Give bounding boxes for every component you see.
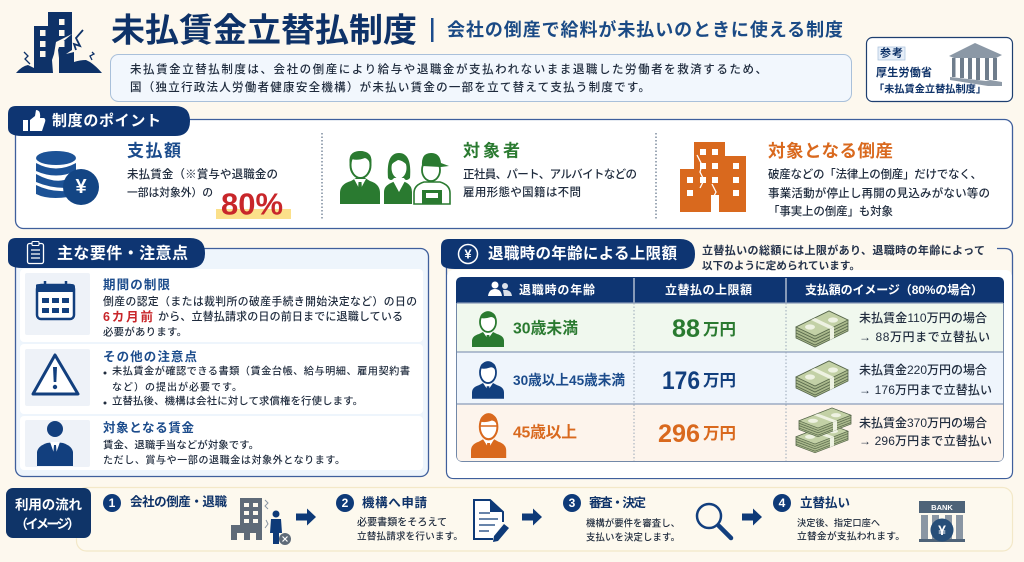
step 3: 機構が要件を審査し、 — [586, 518, 680, 528]
panel: 制度のポイント — [8, 106, 1012, 228]
step 1: 会社の倒産・退職 — [130, 494, 227, 509]
icon: cracked orange building — [680, 142, 746, 212]
arrow — [522, 508, 542, 526]
対象となる倒産 text block: 「事実上の倒産」も対象 — [768, 204, 894, 218]
note text: 以下のように定められています。 — [702, 260, 860, 272]
reference box — [866, 38, 1012, 102]
worker: cap and apron — [414, 153, 450, 204]
intro text block: 未払賃金立替払制度は、会社の倒産により給与や退職金が支払われないまま退職した労働者を救済するため、 — [130, 62, 767, 76]
step 4: 立替払い — [800, 495, 850, 510]
table header: 立替払の上限額 — [665, 282, 752, 297]
table header — [456, 277, 1004, 303]
step 2: 機構へ申請 — [362, 495, 427, 510]
icon: three workers — [340, 151, 450, 204]
row: 30歳以上45歳未満: 未払賃金220万円の場合 — [859, 362, 987, 377]
row: 30歳未満: → 88万円まで立替払い — [859, 329, 990, 344]
worker: woman — [384, 153, 412, 204]
step 1 — [103, 494, 291, 545]
panel: 退職時の年齢による上限額 — [441, 239, 1012, 478]
row: 45歳以上 — [457, 404, 1003, 461]
label: 利用の流れ: （イメージ） — [15, 516, 80, 532]
step 2: 2 — [342, 496, 349, 510]
row: 30歳以上45歳未満: 30歳以上45歳未満 — [513, 372, 625, 388]
icon: magnifier — [697, 504, 731, 538]
支払額 text block: 一部は対象外）の — [127, 185, 213, 199]
step 4 — [773, 494, 965, 542]
row: その他の注意点: 立替払後、機構は会社に対して求償権を行使します。 — [112, 394, 363, 408]
subtitle: 会社の倒産で給料が未払いのときに使える制度 — [447, 19, 843, 40]
row: 30歳未満: 88 — [672, 315, 700, 343]
reference box: 厚生労働省 — [876, 65, 932, 79]
reference box: 参考 — [880, 46, 903, 60]
支払額 text block: 未払賃金（※賞与や退職金の — [127, 167, 278, 181]
icon: man with glasses — [471, 414, 506, 458]
heading tab: 退職時の年齢による上限額: 退職時の年齢による上限額 — [488, 244, 677, 262]
step 4: 決定後、指定口座へ — [797, 517, 880, 528]
label: 利用の流れ — [6, 488, 91, 538]
row: 30歳未満 — [457, 303, 1003, 352]
intro text block — [110, 54, 852, 102]
row: その他の注意点 — [25, 349, 410, 408]
icon: ministry building — [949, 43, 1002, 86]
row: 期間の制限: 期間の制限 — [103, 278, 170, 292]
row: 期間の制限: 必要があります。 — [103, 326, 187, 338]
icon: closed building and person — [231, 498, 291, 545]
panel: 利用の流れ — [6, 488, 1012, 551]
heading tab: 退職時の年齢による上限額 — [441, 239, 695, 269]
icon: warning triangle — [33, 355, 78, 394]
支払額 text block — [127, 140, 291, 222]
heading tab: 制度のポイント: 制度のポイント — [52, 112, 161, 130]
icon: person in suit — [37, 421, 73, 466]
row: 30歳未満: 30歳未満 — [513, 320, 578, 338]
note text — [702, 243, 985, 272]
row: 対象となる賃金 — [25, 420, 345, 467]
note text: 立替払いの総額には上限があり、退職時の年齢によって — [702, 243, 985, 257]
title: 未払賃金立替払制度 — [111, 12, 417, 48]
対象となる倒産 text block: 対象となる倒産 — [768, 141, 893, 161]
対象となる倒産 text block — [768, 141, 990, 218]
対象となる倒産 text block: 事業活動が停止し再開の見込みがない等の — [768, 186, 990, 200]
row: 期間の制限: 倒産の認定（または裁判所の破産手続き開始決定など）の日の — [103, 294, 417, 308]
icon: bank: ¥ — [938, 522, 946, 538]
row: 45歳以上: 296 — [658, 420, 700, 448]
row: 30歳未満: 未払賃金110万円の場合 — [859, 310, 987, 325]
step 3: 3 — [569, 496, 576, 510]
row: 45歳以上: → 296万円まで立替払い — [859, 433, 992, 448]
row: 45歳以上: 未払賃金370万円の場合 — [859, 415, 987, 430]
icon: coins and yen: ¥ — [75, 176, 87, 198]
icon: bank: BANK — [931, 503, 953, 512]
label: 利用の流れ: 利用の流れ — [15, 498, 82, 512]
row: 30歳以上45歳未満: 万円 — [703, 372, 736, 390]
支払額 text block: 80% — [221, 186, 283, 222]
row: 対象となる賃金: 対象となる賃金 — [103, 420, 194, 435]
icon: coins and yen — [36, 151, 99, 205]
arrow — [742, 508, 762, 526]
対象者 text block — [463, 140, 637, 199]
支払額 text block: 支払額 — [127, 140, 181, 160]
icon: document and pen — [474, 500, 509, 542]
row: 30歳以上45歳未満: 176 — [662, 367, 700, 395]
table header: 支払額のイメージ（80%の場合） — [805, 282, 983, 297]
intro text block: 国（独立行政法人労働者健康安全機構）が未払い賃金の一部を立て替えて支払う制度です。 — [130, 80, 650, 94]
row: 45歳以上: 45歳以上 — [513, 424, 577, 442]
対象となる倒産 text block: 破産などの「法律上の倒産」だけでなく、 — [768, 167, 982, 181]
row: 30歳以上45歳未満: → 176万円まで立替払い — [859, 382, 992, 397]
step 4: 4 — [779, 496, 786, 510]
heading tab: 主な要件・注意点 — [8, 238, 205, 268]
row: 30歳未満: 万円 — [703, 321, 736, 339]
対象者 text block: 対象者 — [463, 140, 520, 160]
step 1: 1 — [109, 496, 116, 510]
step 4: 立替金が支払われます。 — [797, 530, 905, 542]
row: 対象となる賃金: ただし、賞与や一部の退職金は対象外となります。 — [103, 454, 345, 466]
row: その他の注意点: 未払賃金が確認できる書類（賃金台帳、給与明細、雇用契約書 — [112, 364, 410, 378]
row: 期間の制限 — [25, 273, 417, 338]
step 3: 審査・決定 — [589, 495, 646, 510]
row: その他の注意点: その他の注意点 — [103, 349, 197, 364]
icon: calendar — [36, 281, 75, 319]
heading tab: 制度のポイント — [8, 106, 190, 136]
対象者 text block: 雇用形態や国籍は不問 — [463, 185, 581, 199]
対象者 text block: 正社員、パート、アルバイトなどの — [463, 167, 637, 181]
heading tab: 退職時の年齢による上限額: ¥ — [464, 246, 472, 262]
step 3 — [563, 494, 731, 542]
heading tab: 主な要件・注意点: 主な要件・注意点 — [57, 244, 188, 262]
row: 期間の制限: 6カ月前 — [103, 309, 153, 324]
row: 45歳以上: 万円 — [703, 425, 736, 443]
title divider — [431, 18, 434, 42]
row: その他の注意点: など）の提出が必要です。 — [112, 380, 242, 394]
arrow — [296, 508, 316, 526]
row: 期間の制限: から、立替払請求の日の前日までに退職している — [158, 309, 403, 323]
reference box: 「未払賃金立替払制度」 — [874, 82, 986, 96]
row: 30歳以上45歳未満 — [457, 352, 1003, 404]
step 2: 立替払請求を行います。 — [357, 530, 463, 542]
panel: 主な要件・注意点 — [8, 238, 428, 476]
worker: man in suit — [340, 151, 380, 204]
step 2: 必要書類をそろえて — [357, 516, 447, 528]
table header: 退職時の年齢 — [519, 282, 595, 297]
step 3: 支払いを決定します。 — [586, 532, 680, 542]
icon: bank — [919, 501, 965, 542]
icon: collapsing building — [16, 12, 102, 73]
step 2 — [336, 494, 509, 542]
table: age limits — [456, 277, 1004, 462]
row: 対象となる賃金: 賃金、退職手当などが対象です。 — [103, 438, 259, 452]
